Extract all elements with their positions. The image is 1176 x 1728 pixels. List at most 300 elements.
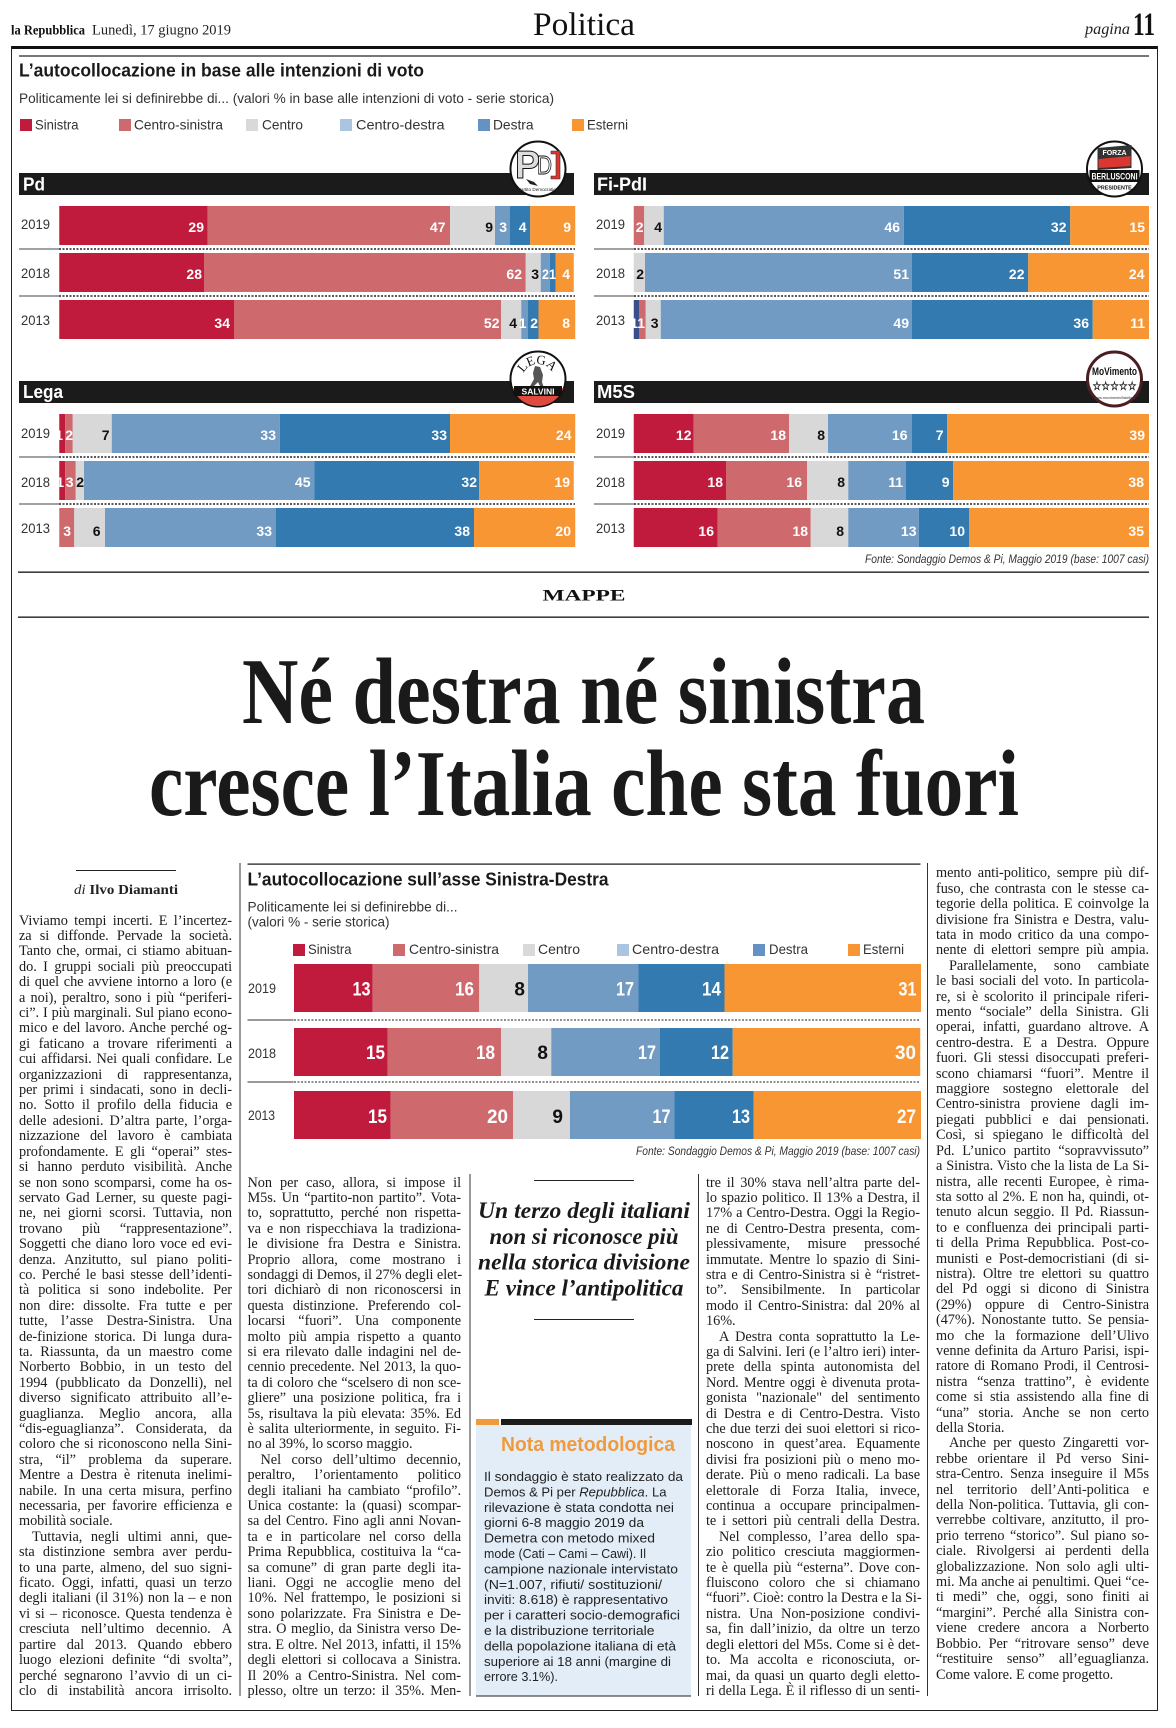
article column 3: di Destra e di Centro-Destra. Visto: [706, 1406, 920, 1422]
article column 2: peraltro, l’orientamento politico: [248, 1467, 461, 1483]
panel: Pd: 28: [186, 266, 202, 282]
article column 4: venne definita da Arturo Parisi, ispi-: [936, 1343, 1149, 1359]
legend: central chart: Esterni: [863, 941, 904, 957]
article column 3: che due terzi dei suoi elettori si rico-: [706, 1421, 920, 1437]
article column 1: delle adesioni. D’altra parte, l’orga-: [19, 1113, 232, 1129]
article column 4: operai, infatti, guardano altrove. A: [936, 1019, 1149, 1035]
article column 1: Tanto che, ormai, ci stiamo abituan-: [19, 943, 232, 959]
panel: Lega: 2019: [21, 425, 50, 441]
icon: Pd logo: D: [537, 150, 552, 180]
article column 4: a Sinistra. Visto che la lista de La Si-: [936, 1158, 1149, 1174]
article column 2: si era rilevato dalle indagini nel de-: [248, 1344, 461, 1360]
stacked bars: central chart: 18: [476, 1043, 495, 1064]
panel: Fi-PdI: 32: [1051, 219, 1067, 235]
panel: Fi-PdI: 22: [1009, 266, 1025, 282]
icon: Pd logo: P: [515, 144, 540, 187]
panel: Lega: 19: [554, 474, 570, 490]
icon: Pd logo: [510, 142, 566, 196]
article column 4: to e confluenza dei principali parti-: [936, 1220, 1149, 1236]
article column 2: ta di coloro che “scelsero di non sce-: [248, 1375, 461, 1391]
article column 3: plessivamente, misure pressoché: [706, 1236, 920, 1252]
legend: central chart: Centro: [538, 941, 580, 957]
article column 1: de-finizione storica. Di lunga dura-: [19, 1329, 232, 1345]
panel: Fi-PdI: 2019: [596, 216, 625, 232]
article column 1: do. I gruppi sociali più preoccupati: [19, 959, 232, 975]
panel: Fi-PdI: 15: [1129, 219, 1145, 235]
article column 4: della Storia.: [936, 1420, 1004, 1436]
panel: Pd: 4: [519, 219, 527, 235]
panel: Lega: 7: [102, 427, 110, 443]
article column 3: tre il 30% stava nell’altra parte del-: [706, 1174, 920, 1190]
panel: M5S: 7: [936, 427, 944, 443]
article column 2: sa comune” di gran parte degli ita-: [248, 1560, 461, 1576]
article column 3: degli elettori del M5s. Come si è det-: [706, 1637, 920, 1653]
panel: M5S: 2019: [596, 425, 625, 441]
panel: Fi-PdI: 4: [654, 219, 662, 235]
article column 1: tà politica si sono indebolite. Per: [19, 1282, 232, 1298]
article column 4: nente di elettori sempre più ampia.: [936, 942, 1149, 958]
stacked bars: central chart: 15: [366, 1043, 385, 1064]
methodology note text: Demos & Pi per Repubblica. La: [484, 1484, 667, 1499]
panel: Pd: Pd: [23, 174, 45, 194]
article column 4: prio terreno “storico”. Sul piano so-: [936, 1528, 1149, 1544]
stacked bars: central chart: 13: [732, 1107, 750, 1128]
icon: Forza Italia logo: BERLUSCONI: [1092, 172, 1138, 182]
panel: M5S: 38: [1128, 474, 1144, 490]
article column 1: nabile. In una certa misura, perfino: [19, 1483, 232, 1499]
legend: central chart: Sinistra: [308, 941, 352, 957]
stacked bars: central chart: 27: [897, 1107, 916, 1128]
methodology note text: Demetra con metodo mixed: [484, 1531, 655, 1546]
panel: M5S: 10: [949, 523, 965, 539]
panel: M5S: 18: [770, 427, 786, 443]
article column 2: le divisione fra Destra e Sinistra.: [248, 1236, 461, 1252]
legend: top chart: Centro-sinistra: [134, 116, 223, 132]
article column 1: perché segnarono l’avvio di un ci-: [19, 1668, 232, 1684]
panel: Lega: 2: [65, 427, 73, 443]
methodology note text: inviti: 8.618) è rappresentativo: [484, 1592, 668, 1607]
article column 1: “dis-eguaglianza”. Considerata, da: [19, 1421, 232, 1437]
article column 4: rebbe orientare il Pd verso Sini-: [936, 1451, 1149, 1467]
panel: M5S: 13: [901, 523, 917, 539]
panel: Lega: 38: [454, 523, 470, 539]
panel: M5S: 35: [1128, 523, 1144, 539]
panel: Pd: 2018: [21, 265, 50, 281]
article column 3: [706, 1174, 922, 1699]
article column 2: degli elettori si collocava a Sinistra.: [248, 1652, 461, 1668]
methodology note text: Il sondaggio è stato realizzato da: [484, 1469, 684, 1484]
panel: M5S: [594, 381, 1149, 547]
stacked bars: central chart: 2018: [248, 1045, 276, 1061]
panel: methodology note: [476, 1419, 692, 1696]
article column 4: Parallelamente, sono cambiate: [949, 958, 1149, 974]
article column 2: Proprio allora, come mostrano i: [248, 1252, 461, 1268]
article column 4: fuori. Gli stessi disoccupati preferi-: [936, 1050, 1149, 1066]
article column 3: fluiscono coloro che si chiamano: [706, 1575, 920, 1591]
methodology note text: della popolazione italiana di età: [484, 1638, 677, 1653]
panel: M5S: M5S: [597, 382, 635, 402]
icon: Forza Italia logo: FORZA: [1102, 150, 1127, 157]
article column 2: tori dichiarò di non riconoscersi in: [248, 1282, 461, 1298]
panel: Pd: 8: [562, 315, 570, 331]
article column 4: Anche per questo Zingaretti vor-: [949, 1435, 1149, 1451]
article column 2: va e non rispecchiava la tradiziona-: [248, 1221, 461, 1237]
article column 4: globalizzazione. Non solo agli ulti-: [936, 1559, 1149, 1575]
stacked bars: central chart: 8: [514, 980, 525, 1000]
article column 2: degli italiani ha cambiato “profilo”.: [248, 1483, 461, 1499]
panel: Lega: 1: [55, 427, 63, 443]
headline: Né destra né sinistra: [242, 640, 925, 744]
article column 3: prete della spinta autonomista del: [706, 1359, 920, 1375]
article column 1: profondamente. E gli “operai” stes-: [19, 1144, 232, 1160]
panel: M5S: 2013: [596, 520, 625, 536]
article column 2: è salita ulteriormente, in seguito. Fi-: [248, 1421, 461, 1437]
panel: M5S: 12: [676, 427, 692, 443]
legend: top chart: Sinistra: [35, 116, 79, 132]
panel: Fi-PdI: 24: [1129, 266, 1145, 282]
article column 2: cennio precedente. Nel 2013, la quo-: [248, 1359, 461, 1375]
stacked bars: central chart: 17: [638, 1043, 656, 1064]
article column 1: vi si – riconosce. Questa tendenza è: [19, 1606, 232, 1622]
article column 3: te è quella più “esterna”. Dove con-: [706, 1560, 920, 1576]
article column 1: cui affidarsi. Nei quali confidare. Le: [19, 1051, 232, 1067]
panel: M5S: 8: [837, 474, 845, 490]
article column 3: divisi fra posizioni più o meno mo-: [706, 1452, 920, 1468]
panel: Lega: [19, 381, 575, 547]
article column 3: Nord. Mentre oggi è divenuta prota-: [706, 1375, 920, 1391]
article column 2: Unica costante: la (quasi) scompar-: [248, 1498, 461, 1514]
article column 4: sta sotto al 2%. E non ha, quindi, ot-: [936, 1189, 1149, 1205]
pull quote: nella storica divisione: [478, 1250, 690, 1274]
article column 3: to”. Sensibilmente. In particolar: [706, 1282, 920, 1298]
central chart subtitle: Politicamente lei si definirebbe di...: [248, 898, 458, 914]
article column 2: gliere” una posizione politica, fra i: [248, 1390, 461, 1406]
article column 2: 5s, risultava la più elevata: 35%. Ed: [248, 1406, 461, 1422]
article column 4: maggiore sostegno elettorale del: [936, 1081, 1149, 1097]
panel: Pd: 9: [485, 219, 493, 235]
panel: Fi-PdI: Fi-PdI: [597, 174, 647, 194]
article column 1: a noi), peraltro, sono i più “periferi-: [19, 990, 232, 1006]
article column 2: stra. O meglio, da Sinistra verso De-: [248, 1621, 461, 1637]
article column 3: “fuori”. Cioè: contro la Destra e la Si-: [706, 1590, 922, 1606]
article column 4: Pd. L’unico partito “sopravvissuto”: [936, 1143, 1149, 1159]
article column 3: 17% a Centro-Destra. Oggi la Regio-: [706, 1205, 920, 1221]
panel: central chart, left-right axis: [248, 864, 921, 1158]
icon: Lega logo: LEGA: [516, 356, 556, 373]
stacked bars: central chart: 2019: [248, 980, 276, 996]
panel: M5S: 9: [942, 474, 950, 490]
panel: Pd: 1: [519, 315, 527, 331]
article column 1: organizzazioni di rappresentanza,: [19, 1067, 232, 1083]
stacked bars: central chart: 9: [552, 1107, 563, 1128]
stacked bars: central chart: 20: [487, 1107, 508, 1128]
article column 3: immutate. Mentre lo spazio di Sini-: [706, 1252, 920, 1268]
icon: M5S logo: [1088, 352, 1142, 406]
legend: top chart: Destra: [493, 116, 534, 132]
panel: Fi-PdI: 51: [893, 266, 909, 282]
panel: Fi-PdI: 2013: [596, 312, 625, 328]
article column 1: Viviamo tempi incerti. E l’incertez-: [19, 913, 232, 929]
panel: M5S: 18: [792, 523, 808, 539]
article column 4: Così, si spiegano le difficoltà del: [936, 1127, 1149, 1143]
article column 1: di quel che avviene intorno a loro (e: [19, 974, 232, 990]
icon: M5S logo: www.movimento5stelle.it: [1094, 396, 1136, 400]
headline: cresce l’Italia che sta fuori: [149, 732, 1019, 836]
methodology note text: mode (Cati – Cami – Cawi). Il: [484, 1546, 646, 1561]
panel: Lega: 2: [76, 474, 84, 490]
panel: Fi-PdI: 2018: [596, 265, 625, 281]
panel: Fi-PdI: [594, 173, 1149, 339]
panel: Pd: 2013: [21, 312, 50, 328]
article column 1: clo di instabilità ancora irrisolto.: [19, 1683, 232, 1699]
methodology note text: per i caratteri socio-demografici: [484, 1608, 680, 1623]
panel: Pd: 3: [499, 219, 507, 235]
article column 2: molto più ampia rispetto a quanto: [248, 1329, 461, 1345]
panel: Pd: 29: [188, 219, 204, 235]
article column 1: gi faticano a trovare riferimenti a: [19, 1036, 232, 1052]
article column 4: tegorie della politica. E coinvolge la: [936, 896, 1149, 912]
article column 2: M5s. Un “partito-non partito”. Vota-: [248, 1190, 461, 1206]
methodology note title: Nota metodologica: [501, 1434, 676, 1456]
article column 4: nistra, alle recenti Europee, è rima-: [936, 1174, 1149, 1190]
article column 1: Mentre a Destra è ritenuta inelimi-: [19, 1467, 232, 1483]
panel: M5S: 2018: [596, 474, 625, 490]
panel: M5S: 16: [892, 427, 908, 443]
article column 3: derate. Più o meno radicali. La base: [706, 1467, 920, 1483]
methodology note text: campione nazionale intervistato: [484, 1561, 678, 1576]
panel: Pd: [19, 173, 575, 339]
icon: Forza Italia logo: PRESIDENTE: [1097, 186, 1132, 192]
legend: top chart: Esterni: [587, 116, 628, 132]
stacked bars: central chart: 15: [368, 1107, 387, 1128]
article column 2: sa del Centro. Fino agli anni Novan-: [248, 1513, 461, 1529]
article column 4: mento “sociale” della Sinistra. Gli: [936, 1004, 1149, 1020]
section label: MAPPE: [542, 588, 626, 604]
panel: M5S: 8: [836, 523, 844, 539]
panel: Pd: 4: [509, 315, 517, 331]
article column 1: luogo elezioni definite “di svolta”,: [19, 1652, 232, 1668]
stacked bars: central chart: 16: [455, 980, 474, 1000]
article column 1: trovano più “rappresentazione”.: [19, 1221, 232, 1237]
article column 4: (29%) oppure di Centro-Sinistra: [936, 1297, 1149, 1313]
panel: Lega: 24: [556, 427, 572, 443]
article column 1: mico e del lavoro. Anche perché og-: [19, 1020, 232, 1036]
panel: M5S: 11: [888, 474, 903, 490]
article column 3: sa, fin dall’inizio, da oltre un terzo: [706, 1621, 920, 1637]
stacked bars: central chart: 17: [616, 980, 634, 1000]
pull quote: E vince l’antipolitica: [483, 1276, 684, 1300]
panel: Fi-PdI: 36: [1073, 315, 1089, 331]
panel: Lega: 33: [260, 427, 276, 443]
legend: top chart: [20, 116, 628, 132]
article column 1: guaglianza. Meglio ancora, alla: [19, 1406, 232, 1422]
central chart source note: Fonte: Sondaggio Demos & Pi, Maggio 2019 (base: 1007 casi): [636, 1146, 920, 1158]
panel: Fi-PdI: 49: [893, 315, 909, 331]
article column 1: to una parte, almeno, del suo signi-: [19, 1560, 232, 1576]
article column 4: scono chiamarsi “fuori”. Mentre il: [936, 1066, 1149, 1082]
article column 4: viene credere ancora a Norberto: [936, 1620, 1149, 1636]
article column 2: [248, 1174, 462, 1699]
article column 4: Come valore. E come progetto.: [936, 1667, 1113, 1683]
article column 1: Tuttavia, negli ultimi anni, que-: [32, 1529, 232, 1545]
article column 3: continua a occupare principalmen-: [706, 1498, 920, 1514]
article column 2: sondaggi di Demos, il 27% degli elet-: [248, 1267, 462, 1283]
article column 1: se non sono scomparsi, come ha os-: [19, 1174, 232, 1190]
masthead: la Repubblica: [11, 24, 85, 38]
panel: Pd: 34: [214, 315, 230, 331]
article column 1: ne, nei giorni scorsi. Tuttavia, non: [19, 1205, 232, 1221]
masthead: Lunedì, 17 giugno 2019: [92, 22, 231, 38]
panel: Lega: 33: [431, 427, 447, 443]
article column 2: questa distinzione. Preferendo col-: [248, 1298, 461, 1314]
byline: [74, 870, 178, 898]
article column 3: to. Ma accolta e riconosciuta, or-: [706, 1652, 920, 1668]
panel: Pd: 52: [484, 315, 500, 331]
article column 4: [936, 865, 1149, 1683]
panel: Lega: 3: [63, 523, 71, 539]
article column 1: denza. Anzitutto, sul piano politi-: [19, 1252, 232, 1268]
legend: central chart: Centro-sinistra: [409, 941, 499, 957]
central chart subtitle: (valori % - serie storica): [248, 914, 390, 930]
heading: top chart title: L’autocollocazione in base alle intenzioni di voto: [19, 60, 424, 80]
panel: Pd: 62: [506, 266, 522, 282]
article column 1: coloro che si riconoscono nella Sini-: [19, 1436, 232, 1452]
article column 3: ne di Centro-Destra presenta, com-: [706, 1221, 920, 1237]
icon: Lega logo: SALVINI: [522, 386, 554, 396]
article column 4: piegati pubblici e dai pensionati.: [936, 1112, 1149, 1128]
masthead: pagina: [1084, 21, 1130, 38]
article column 4: centro-destra. E a Destra. Oppure: [936, 1035, 1149, 1051]
legend: top chart: Centro-destra: [356, 116, 445, 132]
article column 3: stra e di Centro-Sinistra si è “ristret-: [706, 1267, 920, 1283]
article column 3: te i settori più centrali della Destra.: [706, 1513, 920, 1529]
headline: [149, 640, 1019, 836]
article column 1: ta. Riassunta, da un maestro come: [19, 1344, 232, 1360]
article column 4: stra-Centro. Senza inseguire il M5s: [936, 1466, 1149, 1482]
icon: M5S logo: MoVimento: [1092, 366, 1137, 378]
stacked bars: central chart: 2013: [248, 1107, 275, 1123]
article column 4: nistra). Oltre tre elettori su quattro: [936, 1266, 1149, 1282]
panel: M5S: 16: [698, 523, 714, 539]
panel: Pd: 2: [530, 315, 538, 331]
pull quote: non si riconosce più: [490, 1224, 679, 1249]
pull quote: [478, 1180, 691, 1320]
article column 3: elettorale di Forza Italia, invece,: [706, 1483, 920, 1499]
article column 1: servato Gad Lerner, su queste pagi-: [19, 1190, 232, 1206]
panel: M5S: 39: [1129, 427, 1145, 443]
article column 4: munisti e Post-democristiani (di si-: [936, 1251, 1149, 1267]
article column 3: 16%.: [706, 1313, 736, 1329]
byline: di Ilvo Diamanti: [74, 883, 178, 898]
article column 2: sono polarizzate. Fra Sinistra e De-: [248, 1606, 461, 1622]
panel: Lega: Lega: [23, 382, 64, 402]
article column 3: ri della Lega. È il riflesso di un senti-: [706, 1683, 920, 1699]
article column 1: si hanno perduto visibilità. Anche: [19, 1159, 232, 1175]
article column 1: Soggetti che diano loro voce ed evi-: [19, 1236, 232, 1252]
article column 2: 10%. Nel frattempo, le posizioni si: [248, 1590, 461, 1606]
panel: Fi-PdI: 1: [630, 315, 638, 331]
article column 1: no. Sotto il profilo della fiducia e: [19, 1097, 232, 1113]
article column 1: non dire: dissolte. Fra tutte e per: [19, 1298, 232, 1314]
article column 4: come si stia assistendo alla fine di: [936, 1389, 1149, 1405]
article column 4: ti medi” che, oggi, sono finiti ai: [936, 1589, 1149, 1605]
article column 4: (47%). Nonostante tutto. Se pensia-: [936, 1312, 1149, 1328]
methodology note text: errore 3.1%).: [484, 1669, 558, 1684]
article column 3: gonista "nazionale" del sentimento: [706, 1390, 920, 1406]
panel: Lega: 32: [461, 474, 477, 490]
icon: Forza Italia logo: [1087, 142, 1142, 196]
panel: Fi-PdI: 3: [651, 315, 659, 331]
panel: Lega: 1: [56, 474, 64, 490]
article column 3: lo spazio politico. Il 13% a Destra, il: [706, 1190, 920, 1206]
article column 1: partire dal 2013. Quando ebbero: [19, 1637, 232, 1653]
stacked bars: central chart: 14: [702, 980, 721, 1000]
article column 1: nizzazione del lavoro è cambiata: [19, 1128, 232, 1144]
article column 4: “restituire senso” all’eguaglianza.: [936, 1651, 1149, 1667]
article column 1: degli italiani (il 31%) non la – e non: [19, 1590, 232, 1606]
article column 2: Il 20% a Centro-Sinistra. Nel com-: [248, 1668, 461, 1684]
panel: Lega: 45: [295, 474, 311, 490]
article column 1: diverso significato attribuito all’e-: [19, 1390, 232, 1406]
article column 1: stra, “il” problema da superare.: [19, 1452, 232, 1468]
article column 1: za si diffonde. Pervade la società.: [19, 928, 232, 944]
icon: Pd logo: Partito Democratico: [518, 187, 559, 192]
pull quote: Un terzo degli italiani: [478, 1198, 691, 1223]
article column 4: “una” storia. Anche se non certo: [936, 1405, 1149, 1421]
legend: central chart: Destra: [769, 941, 808, 957]
panel: M5S: 8: [817, 427, 825, 443]
stacked bars: central chart: 8: [537, 1043, 548, 1064]
article column 4: della Non-politica. Tuttavia, gli con-: [936, 1497, 1149, 1513]
panel: Pd: 3: [531, 266, 539, 282]
methodology note text: e la distribuzione territoriale: [484, 1623, 654, 1638]
article column 3: modo il Centro-Sinistra: dal 20% al: [706, 1298, 920, 1314]
article column 4: re, si è scolorito il principale riferi-: [936, 989, 1149, 1005]
article column 4: Centro-sinistra proviene dagli im-: [936, 1096, 1149, 1112]
stacked bars: central chart: 17: [652, 1107, 670, 1128]
article column 4: tata in modo critico da una compo-: [936, 927, 1149, 943]
methodology note text: (N=1.007, rifiuti/ sostituzioni/: [484, 1577, 662, 1592]
panel: Pd: 4: [562, 266, 570, 282]
article column 4: del Pd oggi si dicono di Sinistra: [936, 1281, 1149, 1297]
stacked bars: central chart: 12: [711, 1043, 729, 1064]
article column 3: noscono in quest’area. Equamente: [706, 1436, 920, 1452]
article column 1: sta distinzione sembra aver perdu-: [19, 1544, 232, 1560]
panel: Pd: 2019: [21, 216, 50, 232]
top chart subtitle: Politicamente lei si definirebbe di... (valori % in base alle intenzioni di voto - serie storica): [19, 90, 554, 106]
panel: Pd: 21: [542, 266, 556, 282]
panel: M5S: 16: [786, 474, 802, 490]
article column 4: le basi sociali del voto. In particola-: [936, 973, 1149, 989]
article column 4: divisione fra Sinistra e Destra, valu-: [936, 912, 1149, 928]
article column 4: verrebbe coltivare, anzitutto, il pro-: [936, 1512, 1149, 1528]
panel: Lega: 6: [93, 523, 101, 539]
article column 1: tutte, l’asse Destra-Sinistra. Una: [19, 1313, 232, 1329]
methodology note text: rilevazione è stata condotta nei: [484, 1500, 674, 1515]
legend: top chart: Centro: [262, 116, 303, 132]
article column 2: to, soprattutto, perché non rispetta-: [248, 1205, 461, 1221]
panel: Fi-PdI: 2: [636, 219, 644, 235]
icon: M5S logo: ☆☆☆☆☆: [1092, 379, 1137, 393]
panel: Fi-PdI: 1: [637, 315, 645, 331]
article column 4: ti della Prima Repubblica. Post-co-: [936, 1235, 1149, 1251]
article column 3: zio politico cresciuta maggiormen-: [706, 1544, 920, 1560]
panel: Lega: 2018: [21, 474, 50, 490]
panel: Lega: 20: [555, 523, 571, 539]
article column 1: per primi i sindacati, sono in decli-: [19, 1082, 232, 1098]
legend: central chart: [293, 941, 904, 957]
methodology note text: superiore ai 18 anni (margine di: [484, 1654, 671, 1669]
